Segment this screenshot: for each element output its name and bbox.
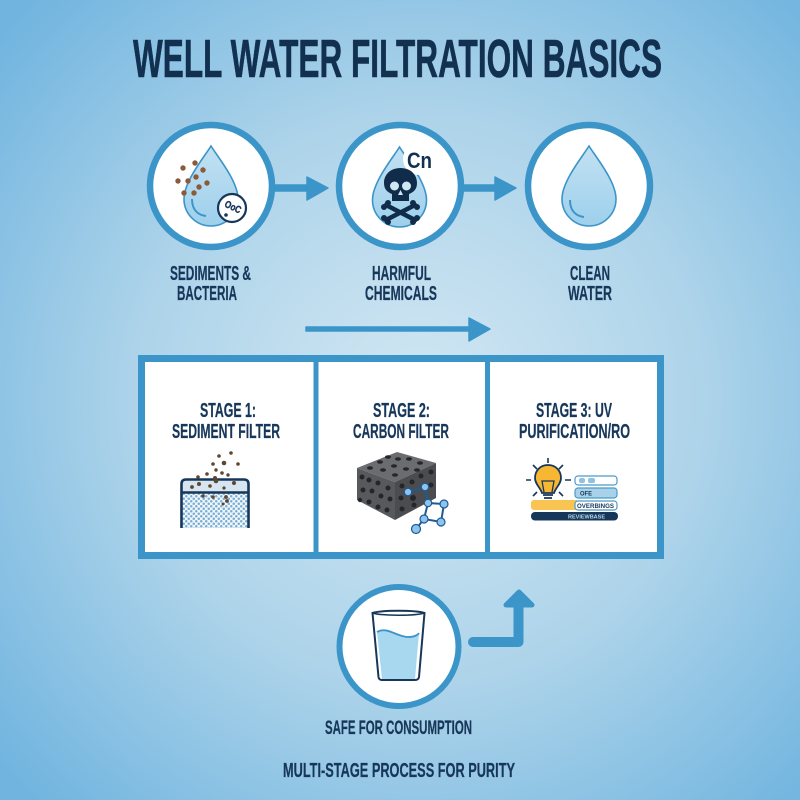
icon: harmful chemicals: Cn xyxy=(407,148,432,173)
arrow: chemicals to clean water xyxy=(464,177,516,200)
label: safe for consumption: SAFE FOR CONSUMPTION xyxy=(325,718,472,739)
stage 2 heading: CARBON FILTER xyxy=(353,420,449,443)
stage 2 heading: STAGE 2: xyxy=(373,399,430,422)
label: sediments and bacteria: SEDIMENTS & xyxy=(170,262,251,285)
label: harmful chemicals: HARMFUL xyxy=(372,262,431,285)
stage 3 heading xyxy=(519,399,630,443)
icon: carbon block with molecule xyxy=(357,452,448,534)
icon: harmful chemicals xyxy=(339,125,461,247)
icon: sediments and bacteria: OoC xyxy=(223,199,243,216)
stage 3 heading: PURIFICATION/RO xyxy=(519,420,630,443)
icon: sediments and bacteria xyxy=(150,125,272,247)
label: clean water xyxy=(568,262,612,305)
icon: UV lamp and purification modules xyxy=(526,458,618,520)
tagline: MULTI-STAGE PROCESS FOR PURITY xyxy=(283,760,515,782)
stage 1 heading: SEDIMENT FILTER xyxy=(172,420,280,443)
label: harmful chemicals: CHEMICALS xyxy=(365,282,437,305)
stage 1 heading: STAGE 1: xyxy=(200,399,256,422)
arrow: process direction xyxy=(306,318,490,341)
icon: UV lamp and purification modules: OVERBINGS xyxy=(577,503,615,510)
label: sediments and bacteria xyxy=(170,262,251,305)
stage 2 heading xyxy=(353,399,449,443)
label: harmful chemicals xyxy=(365,262,437,305)
icon: glass of water xyxy=(340,587,458,706)
label: clean water: WATER xyxy=(568,282,612,305)
arrow: filtered water to glass xyxy=(473,592,532,642)
icon: UV lamp and purification modules: OFE xyxy=(580,490,593,498)
icon: UV lamp and purification modules: REVIEWBASE xyxy=(568,514,605,520)
icon: clean water xyxy=(528,125,650,247)
stage 3 heading: STAGE 3: UV xyxy=(536,399,612,422)
panel: filter stages xyxy=(142,358,660,556)
label: sediments and bacteria: BACTERIA xyxy=(177,282,237,305)
icon: sediment filter xyxy=(182,451,248,528)
arrow: sediments to chemicals xyxy=(275,177,328,200)
label: clean water: CLEAN xyxy=(570,262,610,285)
stage 1 heading xyxy=(172,399,280,443)
